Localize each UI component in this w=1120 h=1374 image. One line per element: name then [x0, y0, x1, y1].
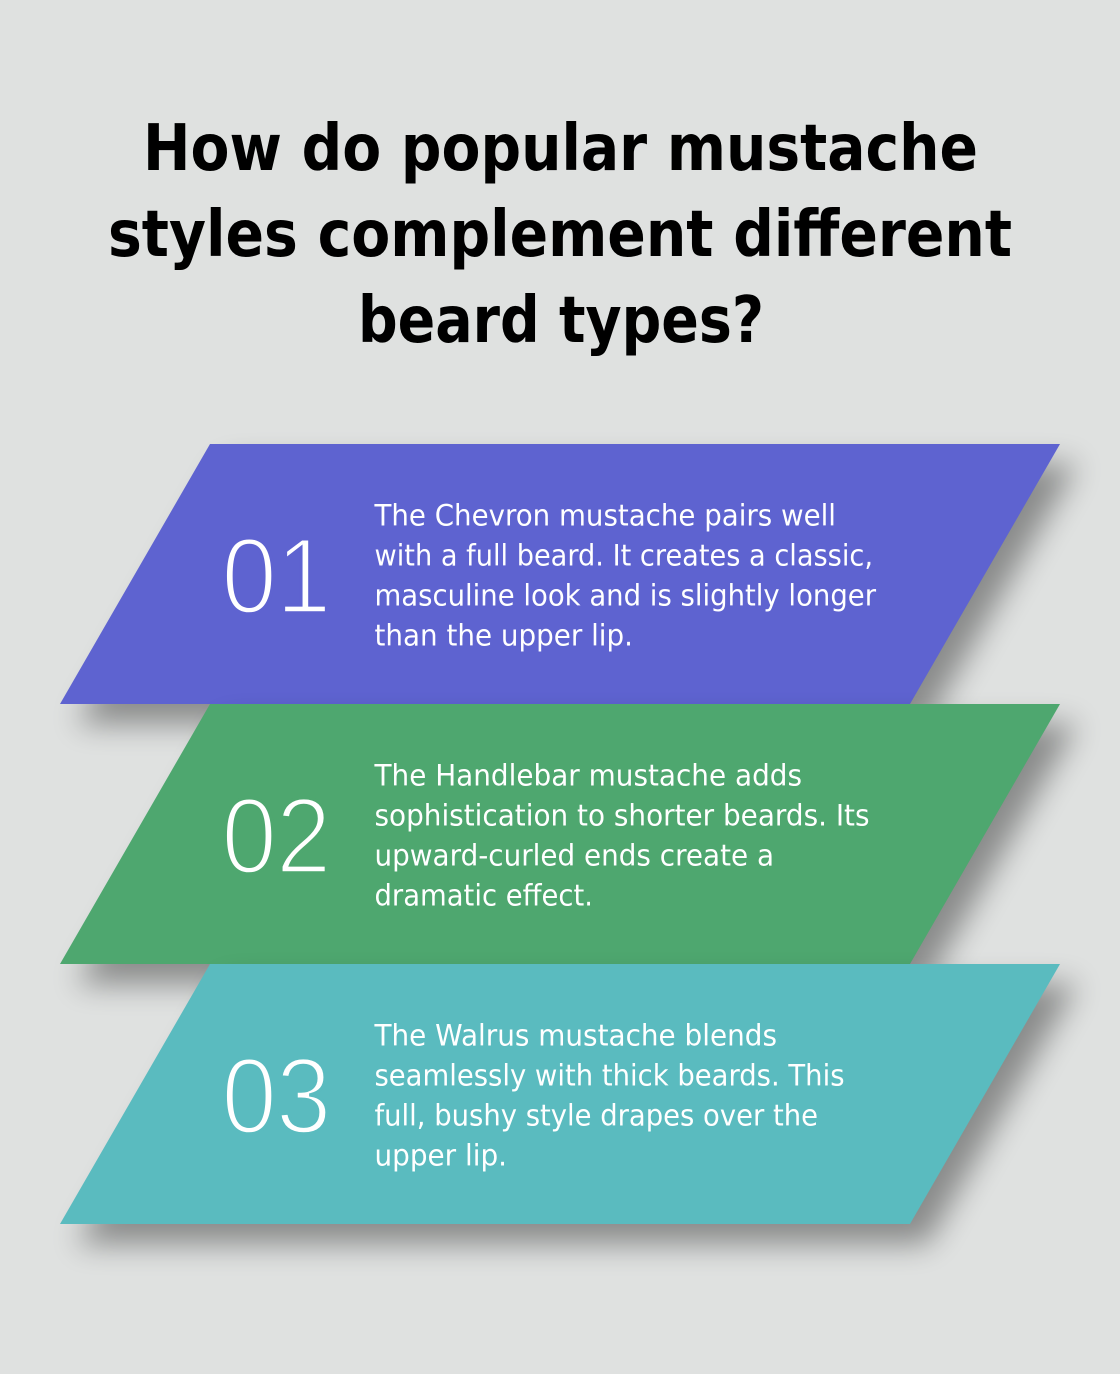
- text: Walrus description: The Walrus mustache blends: [374, 1018, 777, 1052]
- panel: step 03 Walrus: [60, 964, 1077, 1244]
- text: Chevron description: than the upper lip.: [374, 618, 633, 652]
- title: beard types?: [358, 284, 764, 358]
- text: Handlebar description: The Handlebar mustache adds: [374, 758, 802, 792]
- title: How do popular mustache: [143, 112, 978, 186]
- text: Walrus description: full, bushy style drapes over the: [374, 1098, 818, 1132]
- text: Chevron description: The Chevron mustache pairs well: [374, 498, 836, 532]
- text: Chevron description: masculine look and is slightly longer: [374, 578, 877, 612]
- text: Handlebar description: [374, 758, 870, 912]
- text: Handlebar description: sophistication to shorter beards. Its: [374, 798, 870, 832]
- text: Walrus description: [374, 1018, 844, 1172]
- number 03: 03: [222, 1035, 331, 1156]
- number 01: 01: [222, 515, 331, 636]
- panel: step 02 Handlebar: [60, 704, 1077, 984]
- title: styles complement different: [108, 198, 1012, 272]
- text: Chevron description: with a full beard. It creates a classic,: [374, 538, 873, 572]
- number 02: 02: [222, 775, 331, 896]
- text: Handlebar description: upward-curled ends create a: [374, 838, 774, 872]
- text: Walrus description: seamlessly with thick beards. This: [374, 1058, 844, 1092]
- title: [108, 112, 1012, 358]
- text: Walrus description: upper lip.: [374, 1138, 507, 1172]
- panel: step 01 Chevron: [60, 444, 1077, 724]
- text: Handlebar description: dramatic effect.: [374, 878, 593, 912]
- text: Chevron description: [374, 498, 877, 652]
